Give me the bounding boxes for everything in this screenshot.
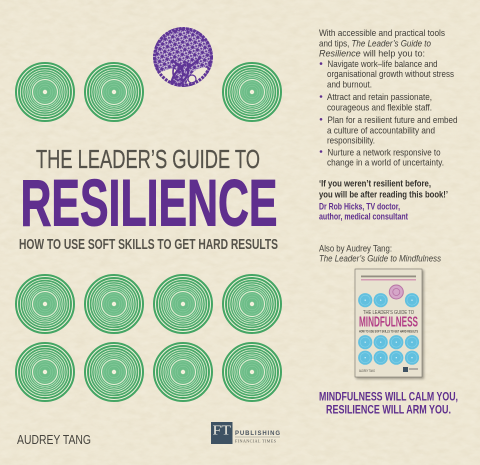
text block: intro and bullet list: change in a world of uncertainty. bbox=[327, 158, 444, 168]
FT Publishing logo: PUBLISHING bbox=[235, 431, 280, 437]
icon: green ring top second bbox=[84, 62, 144, 122]
mini book cover: mindfulness: HOW TO USE SOFT SKILLS TO GET HARD RESULTS bbox=[359, 330, 418, 334]
text block: intro and bullet list: With accessible and practical tools bbox=[319, 28, 445, 38]
icon: purple tree of life bbox=[153, 27, 213, 87]
icon grid: green rings rows bbox=[16, 274, 282, 402]
also by text bbox=[319, 243, 441, 264]
text block: intro and bullet list: Attract and retain passionate, bbox=[327, 92, 432, 102]
FT Publishing logo: FINANCIAL TIMES bbox=[235, 438, 277, 444]
text block: intro and bullet list: organisational growth without stress bbox=[327, 69, 454, 79]
title: the leader's guide to: THE LEADER’S GUIDE TO bbox=[36, 146, 260, 174]
title: resilience: RESILIENCE bbox=[20, 166, 278, 240]
quote: you will be after reading this book!’ bbox=[319, 188, 448, 199]
quote bbox=[319, 177, 448, 199]
also by text: The Leader’s Guide to Mindfulness bbox=[319, 254, 441, 264]
mini book cover: mindfulness: MINDFULNESS bbox=[359, 314, 418, 330]
mini book cover: mindfulness bbox=[355, 269, 424, 379]
quote attribution: Dr Rob Hicks, TV doctor, bbox=[319, 201, 400, 211]
text block: intro and bullet list: Resilience will help you to: bbox=[319, 49, 425, 59]
text block: intro and bullet list: and burnout. bbox=[327, 79, 372, 89]
FT Publishing logo bbox=[211, 422, 280, 444]
mini book cover: mindfulness: AUDREY TANG bbox=[359, 369, 375, 373]
text block: intro and bullet list: Plan for a resilient future and embed bbox=[328, 115, 458, 125]
quote: ‘If you weren’t resilient before, bbox=[319, 177, 431, 188]
text block: intro and bullet list: Navigate work–life balance and bbox=[328, 59, 438, 69]
text block: intro and bullet list: Nurture a network responsive to bbox=[328, 147, 440, 157]
closing tagline bbox=[319, 392, 458, 416]
subtitle: HOW TO USE SOFT SKILLS TO GET HARD RESULTS bbox=[19, 237, 278, 253]
icon: green ring top left bbox=[16, 62, 74, 122]
text block: intro and bullet list: responsibility. bbox=[327, 135, 375, 145]
author name: AUDREY TANG bbox=[17, 432, 91, 447]
text block: intro and bullet list bbox=[319, 28, 458, 168]
text block: intro and bullet list: and tips, The Leader’s Guide to bbox=[319, 38, 431, 48]
text block: intro and bullet list: courageous and flexible staff. bbox=[327, 102, 432, 112]
icon: green ring top right bbox=[222, 62, 282, 122]
mini book cover: mindfulness: THE LEADER’S GUIDE TO bbox=[363, 310, 415, 316]
quote attribution: author, medical consultant bbox=[319, 212, 408, 222]
also by text: Also by Audrey Tang: bbox=[319, 243, 392, 253]
quote attribution bbox=[319, 201, 408, 222]
text block: intro and bullet list: a culture of accountability and bbox=[327, 125, 435, 135]
FT Publishing logo: FT bbox=[212, 422, 232, 438]
